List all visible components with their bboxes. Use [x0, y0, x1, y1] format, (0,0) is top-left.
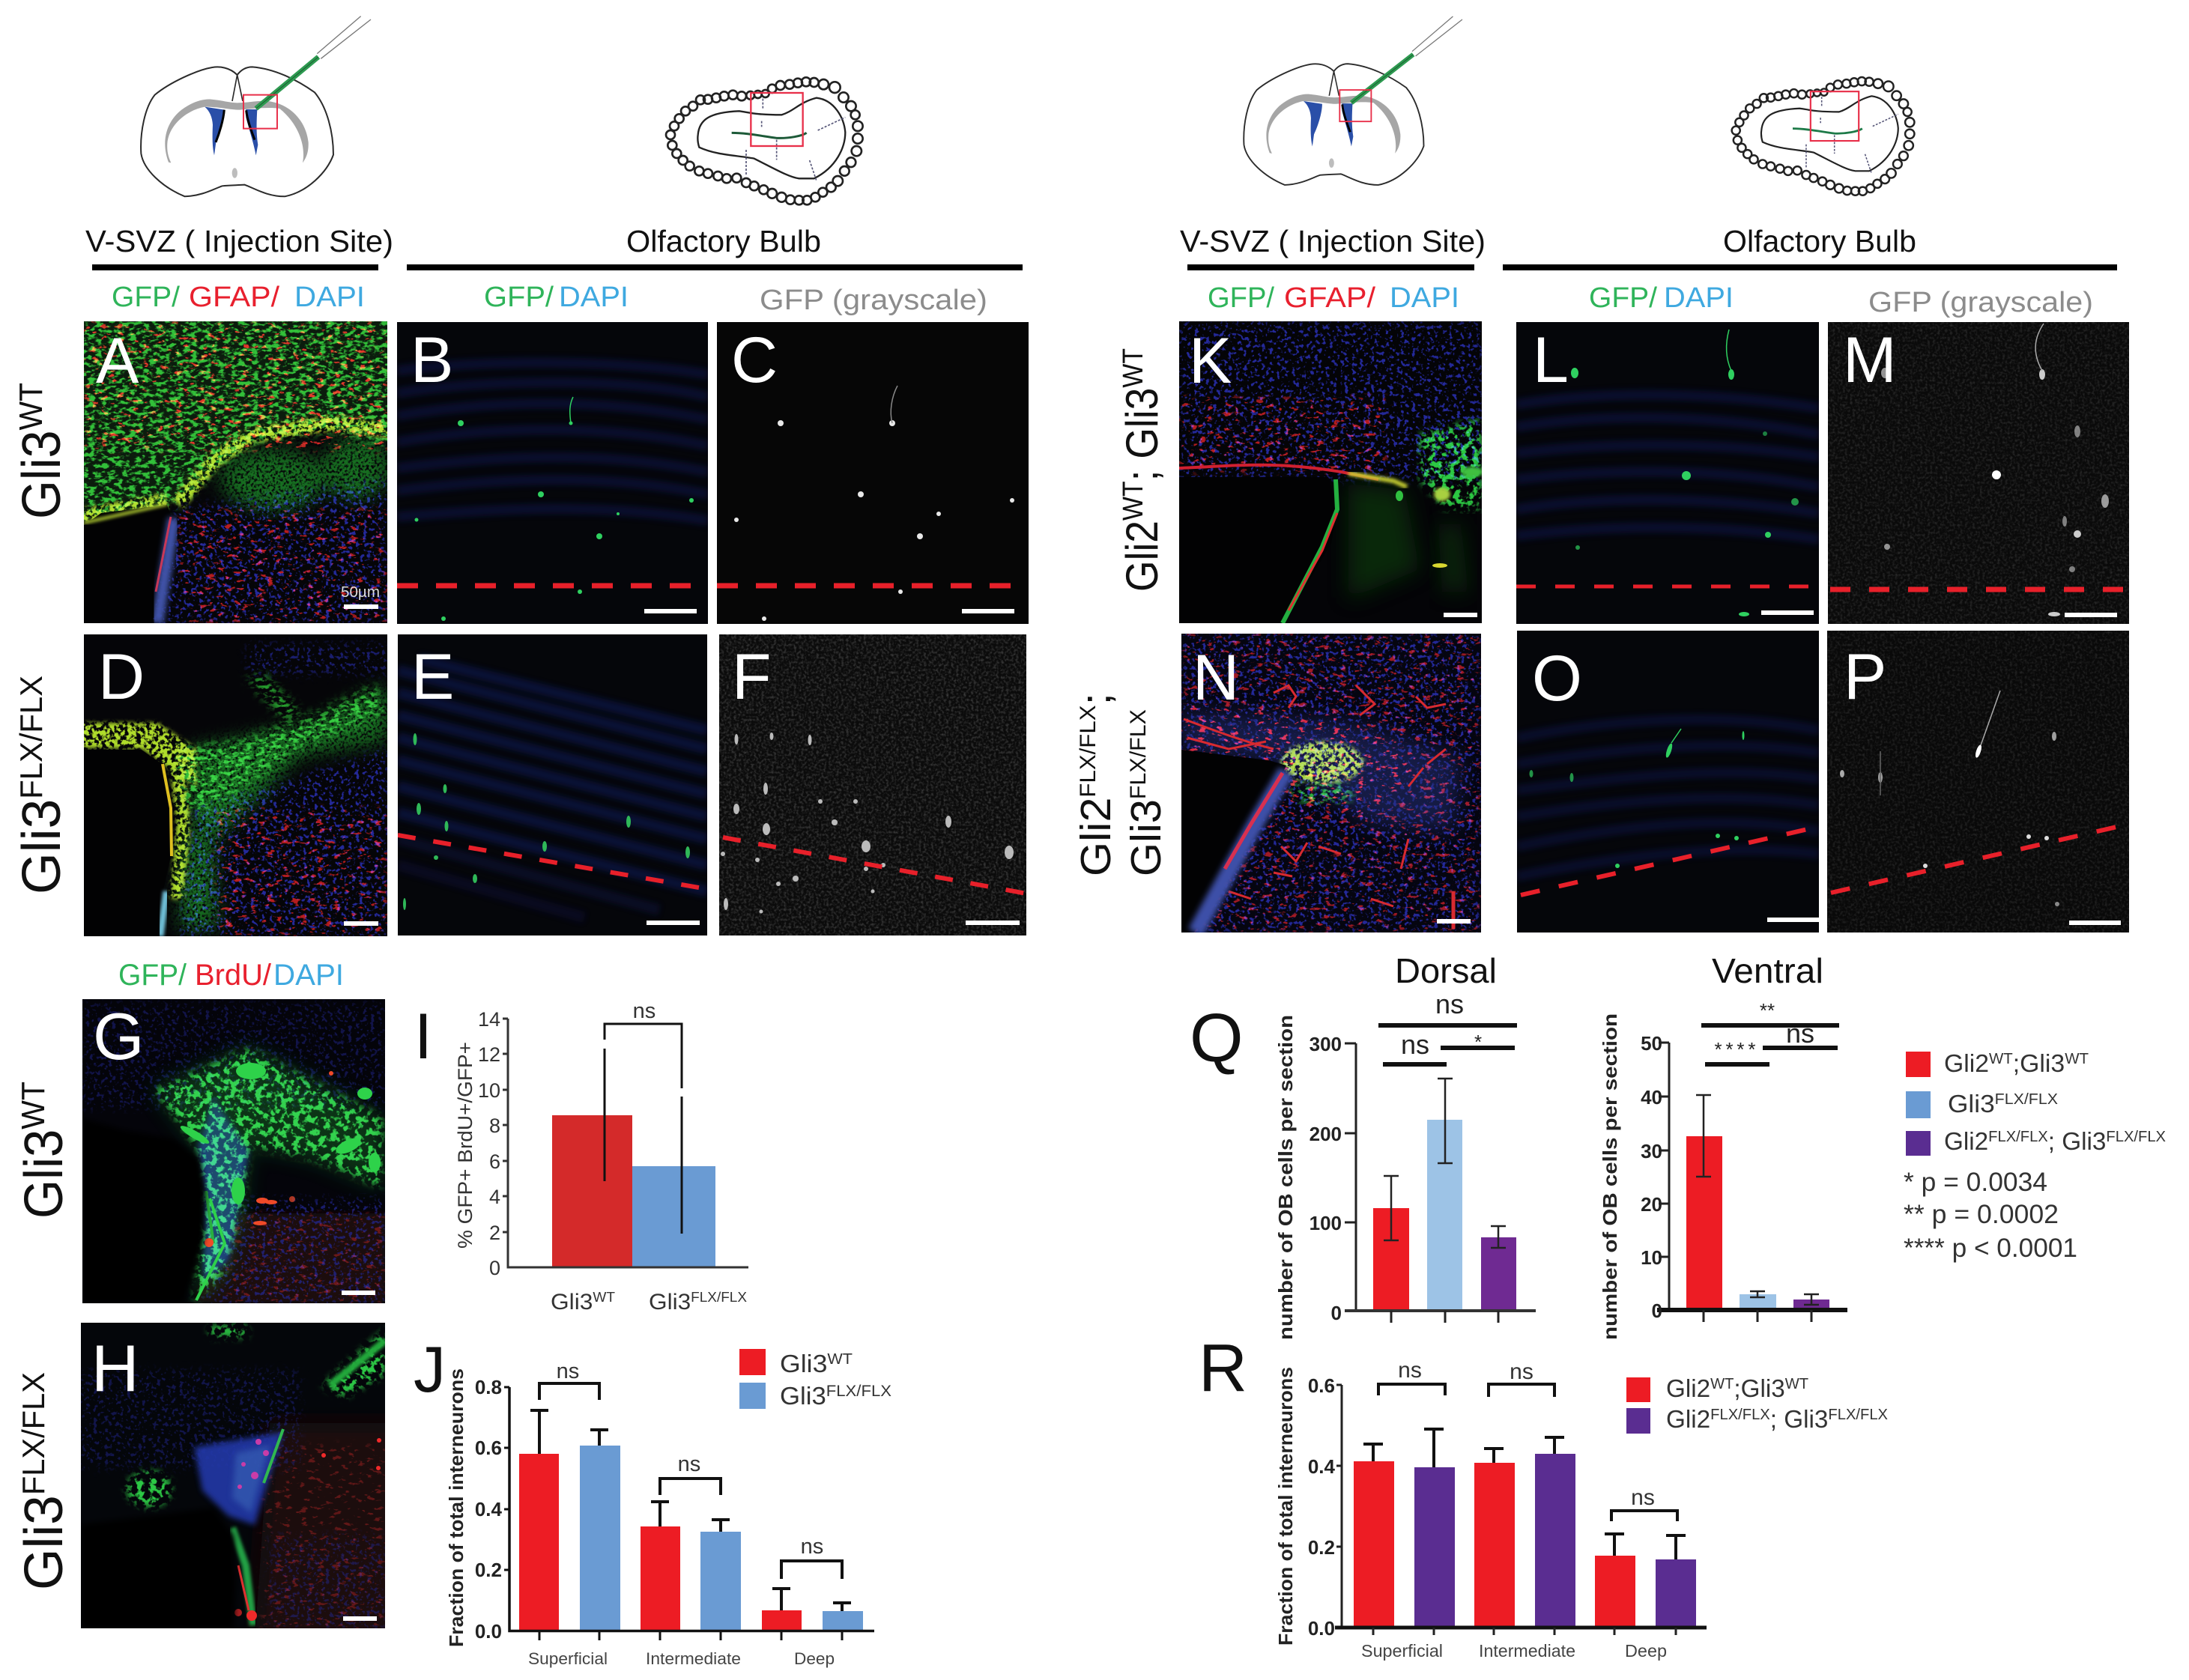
channel labels, right row — [1208, 282, 2093, 318]
channel labels, right row: GFAP/ — [1284, 282, 1375, 314]
chart I: percent GFP+ BrdU+ of GFP+: 0 — [489, 1257, 500, 1279]
row label: Gli2 FLX/FLX; Gli3 FLX/FLX: Gli2 — [1072, 801, 1120, 876]
yellow and green labelled cells — [1348, 467, 1483, 568]
schematic: olfactory bulb section, left — [666, 77, 863, 204]
chart Q ventral: number of OB cells per section: ** — [1760, 999, 1775, 1022]
legend for chart R: WT — [1785, 1376, 1808, 1392]
micrograph panel B — [397, 322, 708, 624]
row label: Gli2 WT; Gli3 WT: ; Gli3 — [1117, 388, 1167, 481]
panel letter D: D — [98, 641, 145, 713]
row label: Gli2 WT; Gli3 WT: WT — [1118, 481, 1149, 521]
row label: Gli2 WT; Gli3 WT: WT — [1118, 348, 1149, 388]
chart J: fraction of total interneurons — [445, 1359, 874, 1668]
chart I: percent GFP+ BrdU+ of GFP+: 6 — [489, 1150, 500, 1173]
chart I: percent GFP+ BrdU+ of GFP+: Gli3 — [551, 1290, 590, 1314]
chart R: fraction of total interneurons — [1274, 1358, 1707, 1661]
row label: Gli3 WT, top left: WT — [13, 383, 49, 430]
panel letter J: J — [414, 1334, 446, 1406]
chart Q dorsal: number of OB cells per section: 300 — [1310, 1033, 1342, 1055]
row label: Gli2 FLX/FLX; Gli3 FLX/FLX: ; — [1072, 693, 1120, 705]
chart Q ventral: number of OB cells per section: **** — [1714, 1038, 1756, 1061]
chart Q dorsal: number of OB cells per section: ns — [1401, 1029, 1429, 1060]
chart R: fraction of total interneurons: 0.0 — [1308, 1617, 1335, 1640]
chart J: fraction of total interneurons: 0.6 — [475, 1437, 502, 1459]
green GFP fan — [154, 1049, 382, 1302]
row label: Gli3 FLX/FLX, top left: FLX/FLX — [13, 676, 49, 799]
chart Q ventral: number of OB cells per section: 50 — [1641, 1032, 1662, 1055]
chart Q dorsal: number of OB cells per section: * — [1474, 1031, 1482, 1053]
chart R: fraction of total interneurons: Deep — [1625, 1641, 1667, 1661]
legend for chart R: ; Gli3 — [1770, 1405, 1828, 1433]
chart I: percent GFP+ BrdU+ of GFP+: % GFP+ BrdU+/GFP+ — [454, 1042, 476, 1249]
bars: superficial, intermediate, deep — [1354, 1454, 1696, 1628]
chart Q ventral: number of OB cells per section: 0 — [1652, 1300, 1662, 1322]
micrograph panel O — [1517, 631, 1819, 933]
legend for chart Q: FLX/FLX — [2106, 1129, 2166, 1145]
row label: Gli3 WT, lower left: Gli3 — [14, 1123, 74, 1219]
chart I: percent GFP+ BrdU+ of GFP+: FLX/FLX — [691, 1290, 747, 1305]
chart J: fraction of total interneurons: ns — [801, 1535, 823, 1559]
chart Q ventral: number of OB cells per section: number of OB cells per section — [1599, 1013, 1621, 1340]
micrograph panel K — [1179, 321, 1483, 623]
red BrdU cells — [205, 1071, 333, 1247]
chart R: fraction of total interneurons: 0.6 — [1308, 1374, 1335, 1397]
schematic: coronal brain section with injection pipette, left — [141, 16, 371, 196]
chart J: fraction of total interneurons: 0.8 — [475, 1376, 502, 1398]
channel label for panels G and H: GFP/ — [118, 959, 187, 992]
chart R: fraction of total interneurons: ns — [1631, 1485, 1655, 1510]
GFP positive cells — [403, 733, 690, 910]
legend for chart Q: WT — [2065, 1051, 2089, 1067]
panel letter O: O — [1532, 643, 1582, 715]
legend for chart Q: WT — [1989, 1051, 2013, 1067]
legend for chart Q: Gli2 — [1944, 1127, 1988, 1155]
panel letter B: B — [411, 324, 453, 396]
legend for chart J: FLX/FLX — [826, 1383, 891, 1400]
panel letter L: L — [1533, 324, 1569, 396]
p value key: * p = 0.0034 — [1904, 1168, 2047, 1197]
chart I: percent GFP+ BrdU+ of GFP+: 14 — [478, 1008, 500, 1031]
legend for chart R: Gli2 — [1666, 1374, 1710, 1402]
red dashed boundary — [397, 583, 708, 589]
channel labels, left row: GFAP/ — [189, 282, 279, 313]
schematic: coronal brain section with injection pipette, right — [1244, 16, 1462, 185]
legend for chart R — [1626, 1374, 1888, 1434]
bars: three genotypes — [1686, 1136, 1829, 1310]
micrograph panel M — [1828, 322, 2129, 624]
blue DAPI triangle — [194, 1432, 283, 1525]
bars: superficial, intermediate, deep — [519, 1446, 863, 1631]
chart R: fraction of total interneurons: Intermediate — [1479, 1641, 1575, 1661]
magenta cells — [237, 1439, 269, 1489]
red cells at base — [234, 1438, 381, 1621]
channel labels, right row: DAPI — [1664, 282, 1734, 314]
micrograph panel N — [1181, 634, 1481, 933]
chart Q ventral: number of OB cells per section: 40 — [1641, 1086, 1662, 1109]
chart I: percent GFP+ BrdU+ of GFP+: 4 — [489, 1186, 500, 1208]
chart I: percent GFP+ BrdU+ of GFP+: 12 — [478, 1043, 500, 1066]
chart R: fraction of total interneurons: 0.4 — [1308, 1455, 1336, 1478]
column heading: olfactory bulb, left: Olfactory Bulb — [626, 224, 821, 258]
chart Q ventral: number of OB cells per section: 30 — [1641, 1140, 1662, 1162]
channel label for panels G and H: DAPI — [273, 959, 344, 992]
chart J: fraction of total interneurons: 0.2 — [475, 1559, 502, 1581]
legend for chart J: Gli3 — [780, 1350, 824, 1377]
row label: Gli3 FLX/FLX, lower left: FLX/FLX — [16, 1372, 51, 1495]
row label: Gli3 FLX/FLX, top left: Gli3 — [12, 798, 72, 894]
channel labels, left row — [112, 282, 987, 316]
legend for chart J: Gli3 — [780, 1382, 824, 1410]
micrograph panel F — [719, 634, 1026, 935]
grayscale GFP cells — [721, 733, 1014, 914]
legend for chart J: WT — [827, 1351, 853, 1368]
chart R: fraction of total interneurons: Superficial — [1361, 1641, 1443, 1661]
column heading: olfactory bulb, left — [407, 224, 1023, 270]
chart Q dorsal: number of OB cells per section — [1274, 989, 1536, 1340]
blue DAPI column — [199, 1097, 249, 1282]
GFP positive cells — [1571, 330, 1799, 616]
chart Q ventral: number of OB cells per section — [1599, 999, 1847, 1340]
chart title: Ventral: Ventral — [1712, 951, 1823, 990]
row label: Gli2 FLX/FLX; Gli3 FLX/FLX: FLX/FLX — [1076, 705, 1100, 798]
chart R: fraction of total interneurons: 0.2 — [1308, 1536, 1335, 1559]
legend for chart Q — [1906, 1049, 2166, 1156]
panel letter C: C — [731, 324, 778, 396]
scale bar with 50 micrometre label — [342, 586, 379, 609]
channel labels, right row: GFP/ — [1208, 282, 1274, 314]
panel letter Q: Q — [1190, 1000, 1244, 1076]
GFP positive cells — [1530, 729, 1744, 868]
chart I: percent GFP+ BrdU+ of GFP+ — [454, 999, 748, 1314]
chart J: fraction of total interneurons: Fraction of total interneurons — [445, 1368, 467, 1647]
row label: Gli3 FLX/FLX, lower left: Gli3 — [14, 1494, 74, 1590]
chart Q dorsal: number of OB cells per section: 200 — [1310, 1123, 1342, 1145]
bar: Gli3 WT — [552, 1115, 632, 1267]
channel labels, right row: GFP/ — [1589, 282, 1657, 314]
row label: Gli2 WT; Gli3 WT: Gli2 — [1117, 512, 1167, 592]
row label: Gli2 FLX/FLX; Gli3 FLX/FLX: Gli3 — [1122, 801, 1170, 876]
column heading: olfactory bulb, right: Olfactory Bulb — [1723, 224, 1916, 258]
row label: Gli3 WT, top left: Gli3 — [12, 423, 72, 519]
chart J: fraction of total interneurons: Deep — [794, 1649, 835, 1668]
chart I: percent GFP+ BrdU+ of GFP+: Gli3 — [649, 1290, 688, 1314]
channel labels, left row: GFP/ — [484, 282, 554, 313]
panel letter F: F — [732, 641, 772, 713]
legend for chart R: FLX/FLX — [1828, 1407, 1888, 1423]
micrograph panel D — [75, 634, 387, 936]
chart Q dorsal: number of OB cells per section: ns — [1435, 989, 1464, 1019]
panel letter I: I — [414, 1001, 432, 1073]
chart R: fraction of total interneurons: ns — [1510, 1359, 1533, 1384]
channel labels, left row: GFP (grayscale) — [760, 285, 987, 316]
micrograph panel P — [1827, 631, 2129, 933]
chart J: fraction of total interneurons: Superficial — [528, 1649, 608, 1668]
chart Q dorsal: number of OB cells per section: 0 — [1331, 1302, 1342, 1324]
chart I: percent GFP+ BrdU+ of GFP+: ns — [633, 999, 656, 1023]
chart R: fraction of total interneurons: Fraction of total interneurons — [1274, 1367, 1297, 1646]
legend for chart R: WT — [1710, 1376, 1734, 1392]
chart title: Dorsal: Dorsal — [1395, 951, 1497, 990]
red GFAP processes — [1184, 685, 1453, 929]
chart J: fraction of total interneurons: 0.0 — [475, 1620, 502, 1643]
chart I: percent GFP+ BrdU+ of GFP+: 8 — [489, 1115, 500, 1137]
legend for chart Q: Gli2 — [1944, 1049, 1988, 1077]
micrograph panel G — [82, 999, 385, 1303]
p value key: ** p = 0.0002 — [1904, 1200, 2059, 1229]
chart I: percent GFP+ BrdU+ of GFP+: 2 — [489, 1222, 500, 1244]
GFP positive cells — [415, 397, 694, 621]
chart Q ventral: number of OB cells per section: 10 — [1641, 1246, 1662, 1269]
green GFP areas — [127, 1326, 385, 1507]
legend for chart R: FLX/FLX — [1710, 1407, 1770, 1423]
panel letter K: K — [1189, 325, 1232, 397]
legend for chart J — [739, 1349, 891, 1410]
scale bar with 50 micrometre label: 50µm — [341, 584, 380, 601]
chart J: fraction of total interneurons: ns — [557, 1359, 579, 1383]
panel letter G: G — [93, 999, 144, 1073]
chart J: fraction of total interneurons: ns — [678, 1452, 700, 1476]
panel letter H: H — [91, 1331, 139, 1405]
chart Q dorsal: number of OB cells per section: 100 — [1310, 1212, 1342, 1234]
channel labels, right row: GFP (grayscale) — [1868, 287, 2093, 318]
row label: Gli2 FLX/FLX; Gli3 FLX/FLX — [1072, 693, 1170, 876]
panel letter E: E — [411, 641, 454, 713]
micrograph panel C — [717, 322, 1029, 624]
chart Q ventral: number of OB cells per section: ns — [1786, 1018, 1814, 1049]
channel labels, left row: GFP/ — [112, 282, 180, 313]
chart Q dorsal: number of OB cells per section: number of OB cells per section — [1274, 1015, 1297, 1340]
chart I: percent GFP+ BrdU+ of GFP+: 10 — [478, 1079, 500, 1102]
row label: Gli3 WT, lower left: WT — [15, 1082, 52, 1129]
chart Q ventral: number of OB cells per section: 20 — [1641, 1193, 1662, 1216]
panel letter A: A — [96, 325, 139, 397]
legend for chart Q: ; Gli3 — [2048, 1127, 2106, 1155]
chart R: fraction of total interneurons: ns — [1398, 1358, 1422, 1383]
p value key — [1904, 1168, 2077, 1263]
legend for chart R: Gli2 — [1666, 1405, 1710, 1433]
chart J: fraction of total interneurons: 0.4 — [475, 1498, 503, 1520]
grayscale GFP cells — [1881, 324, 2109, 616]
grayscale GFP cells — [1840, 691, 2059, 906]
channel labels, right row: DAPI — [1390, 282, 1459, 314]
chart J: fraction of total interneurons: Intermediate — [646, 1649, 741, 1668]
column heading: olfactory bulb, right — [1503, 224, 2117, 270]
legend for chart Q: Gli3 — [1948, 1090, 1992, 1118]
micrograph panel H — [81, 1323, 397, 1640]
channel labels, left row: DAPI — [559, 282, 629, 313]
column heading: V-SVZ injection site, left: V-SVZ ( Injection Site) — [85, 224, 393, 258]
micrograph panel E — [398, 634, 707, 935]
channel label for panels G and H: BrdU/ — [195, 959, 272, 992]
legend for chart R: ;Gli3 — [1734, 1374, 1785, 1402]
chart I: percent GFP+ BrdU+ of GFP+: WT — [593, 1290, 615, 1305]
row label: Gli2 FLX/FLX; Gli3 FLX/FLX: FLX/FLX — [1126, 709, 1151, 799]
grayscale GFP cells — [734, 386, 1014, 621]
panel letter R: R — [1199, 1331, 1247, 1406]
legend for chart Q: FLX/FLX — [1995, 1091, 2058, 1108]
legend for chart Q: ;Gli3 — [2013, 1049, 2065, 1077]
p value key: **** p < 0.0001 — [1904, 1234, 2077, 1263]
panel letter M: M — [1843, 324, 1897, 396]
legend for chart Q: FLX/FLX — [1988, 1129, 2048, 1145]
micrograph panel L — [1516, 322, 1819, 624]
panel letter P: P — [1844, 641, 1886, 713]
red dashed boundary — [398, 835, 707, 889]
micrograph panel A — [75, 315, 397, 623]
bars: three genotypes — [1373, 1120, 1516, 1311]
channel label for panels G and H — [118, 959, 344, 992]
schematic: olfactory bulb section, right — [1732, 77, 1914, 195]
bar: Gli3 FLX/FLX — [632, 1166, 715, 1267]
column heading: V-SVZ injection site, right: V-SVZ ( Injection Site) — [1180, 224, 1486, 258]
channel labels, left row: DAPI — [294, 282, 365, 313]
panel letter N: N — [1193, 642, 1239, 714]
